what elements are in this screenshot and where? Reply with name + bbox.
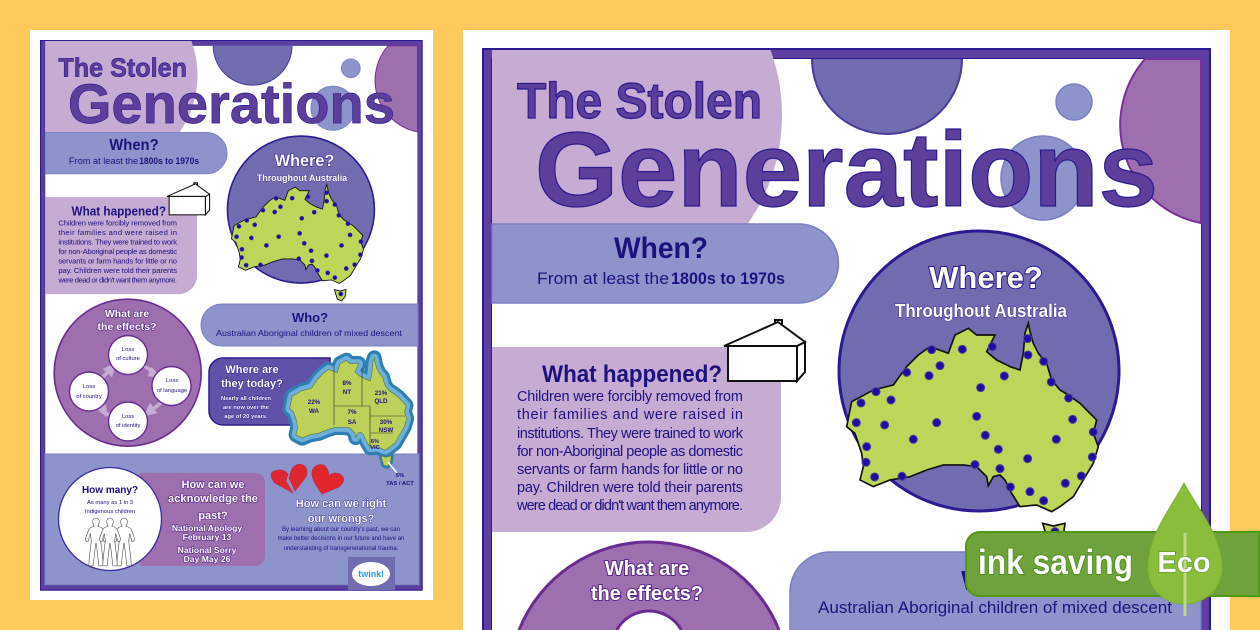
effects circle [54, 299, 201, 446]
title: The Stolen [58, 53, 187, 83]
icon: heart [312, 465, 344, 494]
what happened panel: What happened? [71, 204, 166, 218]
loss of culture: of culture [116, 356, 140, 362]
when panel: 1800s to 1970s [139, 156, 199, 166]
who panel [790, 552, 1201, 630]
what happened panel: were dead or didn't want them anymore. [57, 276, 177, 285]
what happened panel: for non-Aboriginal people as domestic [58, 247, 177, 256]
loss of identity [108, 402, 148, 441]
small circle [1056, 84, 1092, 120]
state borders [334, 366, 405, 446]
state labels: 22% [308, 399, 321, 406]
right circle [1120, 59, 1201, 223]
medium circle [311, 86, 355, 130]
what happened panel: were dead or didn't want them anymore. [516, 498, 743, 514]
eco badge [966, 483, 1259, 616]
acknowledge panel: National Apology [172, 523, 242, 533]
icon: house [724, 320, 805, 381]
icon: broken heart [271, 464, 307, 493]
frame [482, 48, 1211, 630]
state labels: WA [309, 408, 320, 415]
top circle [213, 46, 292, 85]
small poster [40, 40, 423, 591]
state labels: SA [348, 419, 357, 426]
large poster card [463, 30, 1230, 630]
small circle [341, 59, 360, 78]
state labels: TAS / ACT [386, 481, 414, 487]
acknowledge panel: acknowledge the [168, 493, 258, 505]
right our wrongs: How can we right [296, 498, 387, 510]
when panel: From at least the [69, 156, 138, 166]
what happened panel: pay. Children were told their parents [517, 480, 743, 496]
loss of language: Loss [166, 378, 178, 384]
state labels [308, 380, 414, 487]
effects arrows [93, 363, 162, 417]
small poster card [30, 30, 433, 600]
where are they today panel: Where are [225, 364, 279, 376]
small poster top section [40, 40, 423, 591]
how many circle: How many? [82, 485, 138, 496]
what happened panel: institutions. They were trained to work [517, 426, 744, 442]
state labels: VIC [370, 445, 381, 451]
effects circle: What are [105, 308, 149, 320]
map of australia with dots [847, 323, 1098, 545]
how many circle: Indigenous children [85, 509, 135, 515]
what happened panel: Children were forcibly removed from [517, 389, 743, 405]
loss of identity: of identity [116, 423, 141, 429]
where circle [839, 231, 1119, 545]
what happened panel: Children were forcibly removed from [58, 218, 177, 227]
effects circle: the effects? [591, 583, 703, 605]
loss of culture: Loss [122, 347, 134, 353]
right circle [375, 46, 417, 132]
acknowledge panel [140, 473, 265, 566]
state labels: NT [343, 389, 351, 396]
what happened panel: pay. Children were told their parents [58, 266, 177, 275]
loss of country: Loss [83, 384, 95, 390]
when panel: From at least the [537, 269, 669, 288]
effects circle: What are [605, 558, 689, 580]
when panel [492, 224, 838, 303]
where are they today panel: age of 20 years. [224, 414, 268, 420]
acknowledge panel: National Sorry [178, 545, 237, 555]
who panel: Who? [292, 310, 328, 325]
what happened panel: for non-Aboriginal people as domestic [517, 444, 743, 460]
what happened panel: their families and were raised in [58, 228, 177, 237]
who panel [201, 304, 418, 346]
where circle: Throughout Australia [895, 301, 1068, 321]
what happened panel [492, 347, 781, 532]
loss of language: of language [157, 388, 187, 394]
right our wrongs: our wrongs? [308, 513, 375, 525]
state labels: 5% [396, 473, 404, 479]
effects circle: the effects? [98, 321, 156, 333]
loss of country [70, 372, 108, 411]
what happened panel: servants or farm hands for little or no [517, 462, 743, 478]
how many circle: As many as 1 in 3 [87, 500, 133, 506]
state map of australia [290, 358, 414, 487]
where circle: Throughout Australia [257, 173, 348, 184]
state labels: 21% [375, 390, 388, 397]
who panel: Australian Aboriginal children of mixed descent [818, 598, 1172, 617]
what happened panel: institutions. They were trained to work [58, 238, 177, 247]
title: The Stolen [517, 73, 762, 129]
twinkl logo: twinkl [358, 569, 384, 579]
icon: house [167, 183, 210, 215]
acknowledge panel: past? [198, 510, 228, 522]
medium circle [1001, 136, 1085, 220]
what happened panel: servants or farm hands for little or no [58, 257, 177, 266]
decorative light purple circle [492, 50, 782, 224]
acknowledge panel: Day May 26 [184, 554, 231, 564]
eco badge: ink saving [978, 543, 1133, 582]
twinkl logo [348, 557, 395, 590]
bottom panel [45, 454, 419, 585]
tas pointer [388, 462, 397, 473]
map of australia with dots [231, 185, 364, 301]
right our wrongs: By learning about our country's past, we can [282, 527, 400, 533]
loss of country: of country [76, 394, 102, 400]
when panel [45, 132, 227, 174]
top circle [812, 59, 962, 134]
state labels: 8% [343, 380, 352, 387]
decorative light purple circle [45, 41, 198, 132]
large poster [482, 48, 1211, 630]
who panel: Australian Aboriginal children of mixed descent [216, 328, 403, 338]
when panel: When? [109, 137, 159, 154]
where are they today panel [209, 358, 330, 425]
state labels: QLD [374, 398, 388, 405]
where are they today panel: are now over the [223, 405, 270, 411]
title: Generations [68, 73, 395, 135]
what happened panel: What happened? [542, 361, 722, 388]
state labels: 7% [348, 409, 357, 416]
state labels: NSW [379, 427, 393, 434]
state labels: 6% [371, 439, 379, 445]
where circle: Where? [275, 152, 334, 170]
right our wrongs: understanding of transgenerational trauma. [284, 546, 399, 552]
right our wrongs [278, 498, 404, 552]
loss of identity: Loss [122, 414, 134, 420]
icon: leaf [1148, 483, 1222, 616]
title: Generations [535, 111, 1158, 229]
effects circle [519, 542, 779, 630]
right our wrongs: make better decisions in our future and have an [278, 536, 404, 542]
where are they today panel: they today? [221, 378, 283, 390]
where circle: Where? [929, 260, 1043, 295]
what happened panel [45, 197, 197, 294]
acknowledge panel: February 13 [183, 532, 232, 542]
loss of culture [108, 336, 148, 374]
frame [40, 40, 423, 591]
acknowledge panel: How can we [182, 479, 244, 491]
who panel: Who? [961, 565, 1039, 596]
icon: three people [86, 518, 134, 566]
when panel: When? [614, 232, 708, 265]
how many circle [58, 468, 162, 570]
state labels: 30% [380, 419, 393, 426]
when panel: 1800s to 1970s [671, 269, 785, 288]
where circle [227, 136, 374, 301]
loss of language [152, 366, 191, 406]
what happened panel: their families and were raised in [517, 407, 743, 423]
eco badge: Eco [1157, 547, 1211, 579]
where are they today panel: Nearly all children [221, 396, 271, 402]
